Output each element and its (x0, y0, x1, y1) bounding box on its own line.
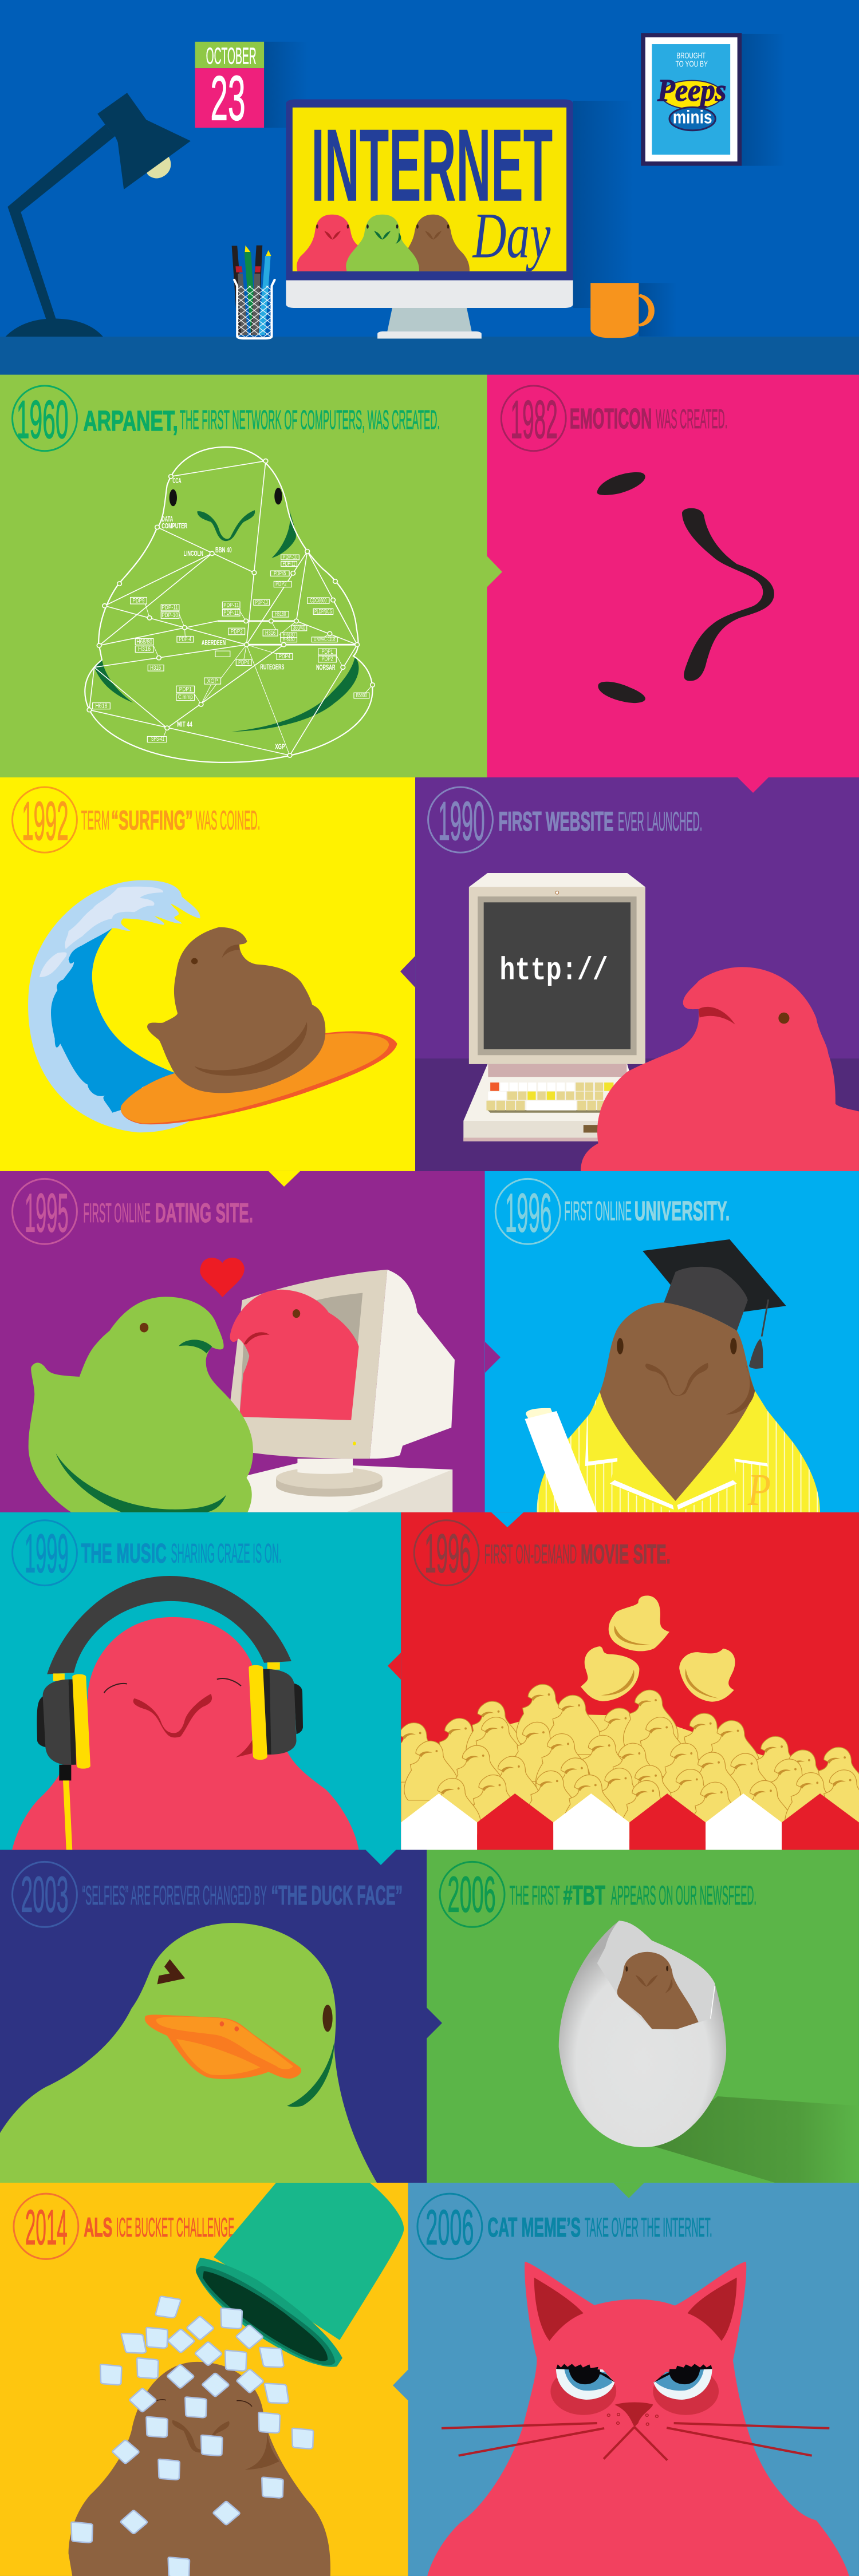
panel: 1999 music sharing (0, 1512, 401, 1850)
network labels: H-6180 (283, 631, 295, 638)
arrow: purple into yellow (400, 956, 415, 987)
green peep (29, 1297, 253, 1512)
arrow: blue into yellow (393, 2369, 408, 2401)
duck bill (145, 2014, 301, 2079)
egg shadow (655, 2096, 859, 2183)
poster: brought to you by Peeps minis: TO YOU BY (675, 59, 708, 69)
network labels: COMPUTER (161, 522, 187, 530)
surfboard (121, 1032, 397, 1124)
network labels: PDP2 (231, 628, 243, 635)
heading: ARPANET: ARPANET, (83, 405, 178, 437)
year badge: 2003 (13, 1862, 77, 1927)
panel: header desk scene: Peeps (657, 73, 726, 108)
text: “THE DUCK FACE” (271, 1880, 403, 1910)
network labels: UNIVAC-1108 (314, 635, 335, 642)
panel: 2003 duck face (0, 1850, 427, 2183)
brown peep surfer (147, 927, 325, 1093)
object shadows (264, 34, 786, 337)
network labels: H316 (150, 664, 161, 671)
peep face details (94, 488, 358, 732)
diploma (525, 1408, 597, 1512)
heading: TBT: #TBT (563, 1880, 605, 1910)
network labels: NORSAR (316, 663, 335, 671)
network labels: XGP (207, 677, 218, 684)
green ice bucket (196, 2183, 404, 2367)
network labels: PDP4 (279, 653, 290, 660)
tassel (749, 1299, 769, 1369)
network labels: PLDP/BCS (314, 608, 332, 615)
panel: 1996 movie site: 1996 (424, 1523, 471, 1584)
heading: music (81, 1538, 282, 1568)
arrow: green into pink (487, 556, 502, 587)
CRT monitor on desk (227, 1270, 455, 1512)
network labels: PDP-11 (283, 560, 295, 567)
yellow gown: P (747, 1465, 771, 1515)
panel: header desk scene: OCTOBER (206, 44, 257, 69)
network labels: H68/80 (136, 638, 152, 645)
icon: heart (200, 1258, 245, 1297)
panel: 1992 surfing: “SURFING” (111, 805, 193, 835)
desk (415, 1058, 859, 1171)
year badge: 1960 (13, 386, 77, 451)
heading: movie site (484, 1539, 671, 1569)
year badge: 1990 (428, 787, 492, 852)
brown peep (408, 215, 470, 271)
arrow: teal into navy (365, 1850, 396, 1865)
falling ice cubes (71, 2296, 313, 2576)
panel: 2014 ALS ice bucket (0, 2183, 408, 2576)
network labels: PDP2 (275, 580, 286, 587)
arrow: red into teal (388, 1653, 401, 1680)
heading: online university (564, 1196, 730, 1226)
poster: brought to you by Peeps minis (641, 33, 742, 166)
brown peep (69, 2362, 330, 2576)
heading: cat memes (487, 2212, 712, 2242)
panel: 2014 ALS ice bucket: 2014 (25, 2199, 68, 2255)
panel: 2003 duck face: 2003 (21, 1867, 69, 1922)
heading: surfing: TERM (81, 805, 109, 835)
green peep (346, 215, 419, 271)
panel: 1992 surfing: WAS COINED. (196, 805, 260, 835)
network labels: PDP-11 (161, 604, 178, 611)
panel: header desk scene: 23 (210, 64, 246, 134)
network labels: PDP-10 (161, 611, 178, 618)
arrow: yellow into dating panel (269, 1171, 300, 1187)
panel: 1992 surfing (0, 777, 415, 1171)
network labels (95, 477, 367, 751)
panel: 1982 emoticon: 1982 (511, 389, 558, 449)
red peep (297, 215, 367, 271)
network labels: H-6180 (283, 635, 295, 643)
network labels: SPS-41 (151, 735, 164, 742)
heading: TBT: THE FIRST (510, 1880, 560, 1910)
panel: 1995 dating site (0, 1171, 485, 1512)
red peep (581, 967, 859, 1171)
network labels: PDP-4 (179, 635, 191, 642)
year badge: 1995 (13, 1179, 77, 1244)
desk surface (0, 337, 859, 376)
arrow: purple into blue (485, 1342, 501, 1373)
network labels: PDP1 (322, 648, 333, 655)
year badge: 2006 (440, 1862, 505, 1927)
arrow: pink into purple (738, 777, 769, 793)
popcorn pile of peeps (388, 1684, 859, 1842)
panel: header desk scene (0, 0, 859, 376)
monitor (286, 99, 573, 339)
panel: 1960 ARPANET (0, 375, 487, 778)
panel: 2006 cat memes (408, 2183, 859, 2576)
heading: emoticon (570, 403, 727, 434)
network labels: CDC6600 (310, 596, 326, 604)
network labels: DATA (161, 515, 173, 523)
arrow: blue into red (491, 1512, 523, 1527)
cracked egg (559, 1921, 726, 2147)
arrow: navy into green (427, 2008, 442, 2038)
popping peeps (581, 1595, 735, 1702)
retro computer: http:// (499, 953, 608, 989)
heading: first website (499, 806, 702, 836)
network labels: BBN 40 (215, 546, 232, 554)
heading: dating site (83, 1198, 253, 1228)
icon: desk lamp (6, 93, 191, 337)
heading: ice bucket: ALS (84, 2212, 112, 2242)
heading: music: THE MUSIC (81, 1538, 167, 1568)
poster: brought to you by Peeps minis: minis (673, 106, 712, 128)
network labels: XGP (275, 742, 285, 751)
network labels: H618 (95, 702, 107, 709)
panel: 1995 dating site: FIRST ONLINE (83, 1198, 151, 1228)
network labels: PDP-11 (223, 602, 239, 609)
calendar (195, 42, 264, 134)
panel: 2006 throwback thursday (427, 1850, 859, 2183)
cat nose and mouth (604, 2402, 667, 2460)
network labels: PDP4 (238, 659, 249, 666)
network labels: PDP-10 (283, 554, 297, 560)
retro computer (463, 873, 657, 1141)
year badge: 1996 (414, 1520, 479, 1586)
network nodes (87, 459, 375, 757)
year badge: 1982 (501, 386, 566, 451)
panel: 1990 first website: 1990 (438, 790, 485, 851)
network labels: H316 (138, 645, 151, 653)
heading: duck face (82, 1880, 403, 1910)
icon: headphones (37, 1576, 303, 1850)
cat eyes (556, 2364, 712, 2400)
whiskers (442, 2423, 829, 2456)
red peep cat (427, 2262, 849, 2576)
year badge: 2006 (417, 2194, 482, 2259)
panel: 1982 emoticon (487, 375, 859, 778)
arrow: green into blue (613, 2183, 644, 2198)
brown peep graduate (600, 1267, 755, 1501)
panel: 2006 throwback thursday: 2006 (448, 1867, 496, 1922)
panel: 1999 music sharing: 1999 (25, 1523, 69, 1584)
icon: orange mug (590, 283, 652, 338)
panel: 2006 cat memes: 2006 (425, 2199, 474, 2255)
panel: 1960 ARPANET: 1960 (17, 389, 69, 449)
network labels: PDP-11 (223, 609, 239, 616)
graduation cap top (643, 1239, 786, 1312)
network labels: C.mmp (178, 693, 193, 701)
network map peep outline (85, 447, 372, 762)
network labels: RUTEGERS (260, 663, 284, 671)
network labels: MIT 44 (177, 720, 192, 729)
network labels: PDP2 (322, 655, 333, 662)
panel: 1996 movie site (388, 1512, 859, 1850)
year badge: 1996 (495, 1179, 560, 1244)
network labels: H6180 (275, 610, 286, 618)
year badge: 1992 (13, 787, 77, 852)
panel: 1996 online university: 1996 (505, 1182, 551, 1243)
green duck-face peep (0, 1923, 377, 2183)
panel: 1960 ARPANET: B5600 (356, 692, 367, 698)
icon: pen cup (232, 246, 275, 338)
panel: 1995 dating site: DATING SITE. (155, 1198, 253, 1228)
emoticon eyes and beak (597, 472, 774, 703)
network labels: 360/40 (293, 624, 305, 631)
network labels: CCA (172, 477, 182, 485)
heading: cat memes: CAT MEME’S (487, 2212, 581, 2242)
network labels: LINCOLN (183, 550, 203, 558)
network labels: PDP1 (179, 686, 192, 693)
popcorn box stripes (401, 1793, 859, 1850)
wave (28, 880, 200, 1132)
network labels: PDP-13 (255, 599, 268, 606)
red peep face (12, 1617, 359, 1850)
year badge: 2014 (14, 2194, 78, 2259)
network labels: PDP9 (132, 597, 145, 604)
brown peep in egg (617, 1952, 699, 2029)
year badge: 1999 (13, 1520, 77, 1586)
network labels: H316 (265, 629, 275, 637)
red peep on screen (230, 1290, 359, 1420)
yellow gown (537, 1390, 820, 1515)
text: ICE BUCKET CHALLENGE (116, 2212, 234, 2242)
panel: header desk scene: Day (472, 200, 551, 272)
panel: 1995 dating site: 1995 (25, 1182, 69, 1243)
poster: brought to you by Peeps minis: BROUGHT (676, 50, 706, 60)
network labels: ABERDEEN (202, 639, 226, 647)
network labels: PDP45 (274, 570, 286, 576)
panel: 1992 surfing: 1992 (22, 790, 69, 851)
network machine boxes (93, 555, 369, 742)
panel: 1990 first website (415, 777, 859, 1171)
panel: 1996 online university (485, 1171, 859, 1515)
